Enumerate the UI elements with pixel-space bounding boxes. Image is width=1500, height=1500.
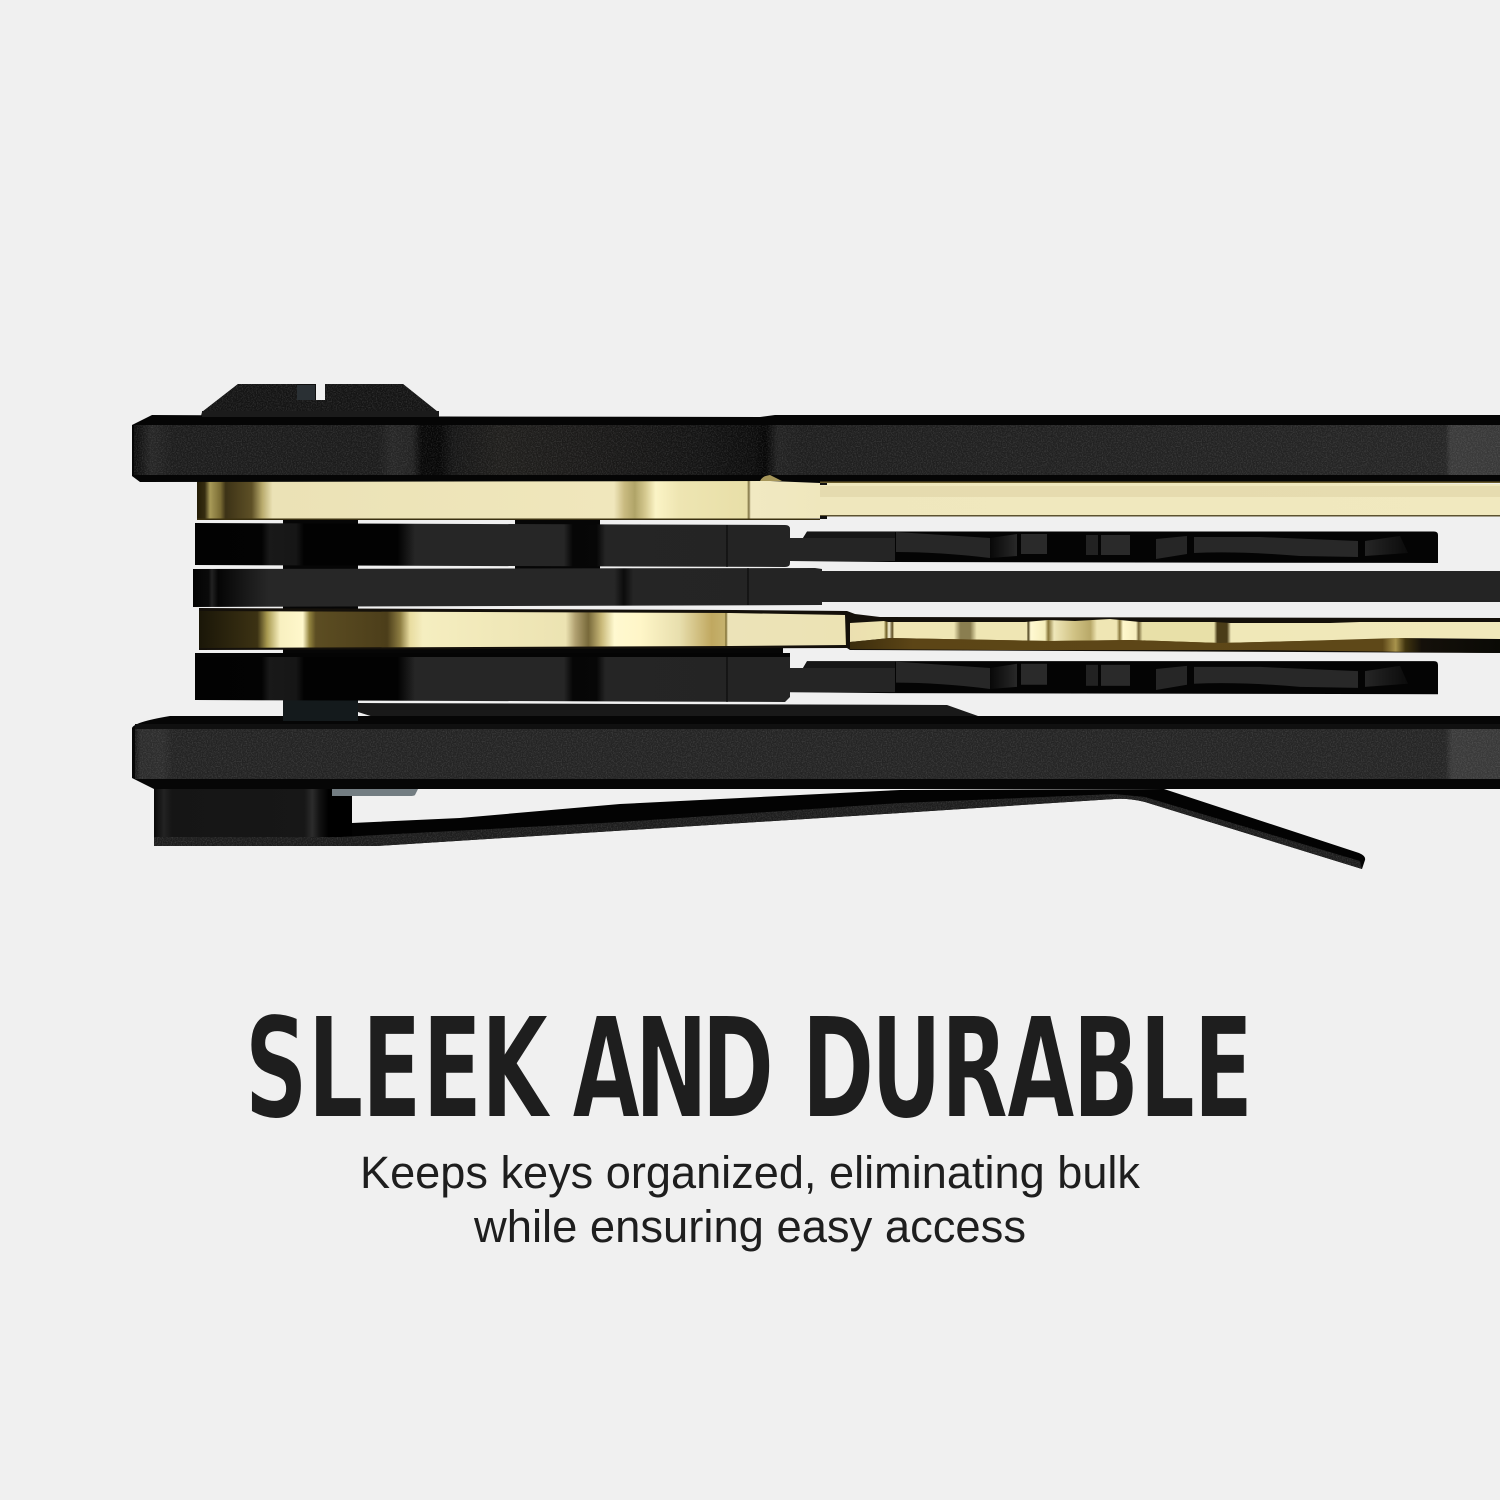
- product: key organizer side view: [132, 384, 1500, 869]
- title: SLEEK AND DURABLE: [244, 987, 1253, 1151]
- screw head: [201, 384, 439, 417]
- subtitle line 1: Keeps keys organized, eliminating bulk: [360, 1147, 1140, 1198]
- top plate: [132, 415, 1500, 483]
- spacer and wedge: [283, 700, 978, 720]
- bottom plate: [132, 716, 1500, 789]
- spacers between keys: [283, 518, 783, 655]
- pocket clip: [154, 789, 1365, 869]
- brass key: top: [197, 480, 1500, 520]
- subtitle line 2: while ensuring easy access: [473, 1201, 1026, 1252]
- brass key: lower: [199, 608, 1500, 653]
- black key: upper: [195, 523, 1438, 567]
- subtitle: [360, 1147, 1140, 1252]
- black key: flat middle: [193, 568, 1500, 607]
- black key: lower: [195, 653, 1438, 702]
